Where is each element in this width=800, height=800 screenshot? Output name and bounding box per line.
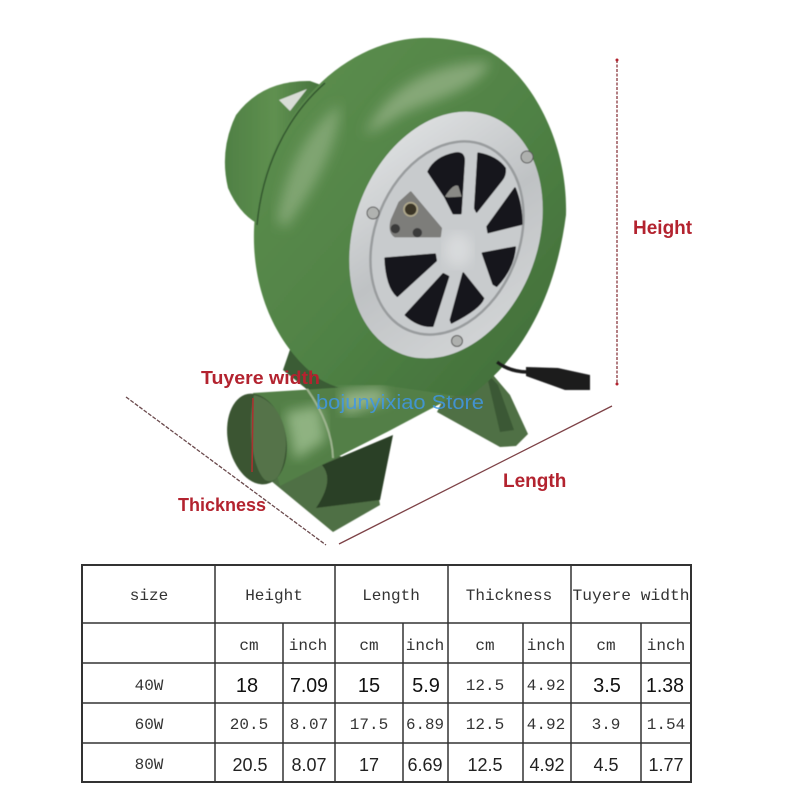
power cable bbox=[497, 362, 528, 372]
body seam bbox=[257, 83, 325, 225]
glossy highlight upper bbox=[365, 62, 490, 135]
screw bottom bbox=[452, 336, 462, 346]
plate inner ring bbox=[343, 118, 551, 358]
blower product illustration bbox=[219, 38, 590, 532]
60W row: 6.89 bbox=[406, 716, 444, 734]
units row: cm bbox=[359, 637, 379, 655]
40W row: 12.5 bbox=[466, 677, 504, 695]
units row: cm bbox=[239, 637, 259, 655]
units row: cm bbox=[596, 637, 616, 655]
pipe collar bbox=[307, 389, 333, 458]
60W row: 3.9 bbox=[592, 716, 620, 734]
header row: Height bbox=[245, 587, 303, 605]
pipe highlight bbox=[285, 405, 326, 460]
80W row: 20.5 bbox=[232, 755, 268, 775]
label: tuyere width: Tuyere width bbox=[201, 367, 320, 388]
header row: Tuyere width bbox=[572, 587, 690, 605]
units row: inch bbox=[527, 637, 565, 655]
60W row: 20.5 bbox=[230, 716, 268, 734]
40W row bbox=[135, 675, 684, 697]
length dimension line bbox=[339, 406, 612, 544]
glossy highlight left bbox=[277, 105, 340, 228]
label: height: Height bbox=[633, 218, 693, 239]
screw top right bbox=[521, 151, 533, 163]
40W row: 18 bbox=[236, 675, 258, 697]
front foot support bbox=[316, 435, 393, 508]
60W row: 8.07 bbox=[290, 716, 328, 734]
80W row: 4.92 bbox=[529, 755, 565, 775]
front foot bbox=[230, 440, 380, 532]
pipe opening bbox=[219, 388, 295, 490]
upper support bbox=[283, 335, 380, 400]
plate outer bbox=[316, 84, 576, 386]
80W row: 8.07 bbox=[291, 755, 327, 775]
size table bbox=[82, 565, 691, 782]
pipe highlight right bbox=[340, 388, 390, 415]
volute body bbox=[254, 38, 566, 396]
40W row: 15 bbox=[358, 675, 380, 697]
table grid bbox=[82, 565, 691, 782]
header row: Length bbox=[362, 587, 420, 605]
rear label sticker bbox=[279, 89, 307, 111]
tuyere width marker bbox=[252, 398, 253, 472]
60W row: 4.92 bbox=[527, 716, 565, 734]
store watermark: bojunyixiao Store bbox=[316, 392, 484, 414]
header row: size bbox=[130, 587, 168, 605]
80W row: 4.5 bbox=[593, 755, 619, 775]
60W row: 1.54 bbox=[647, 716, 685, 734]
rear foot bbox=[437, 362, 528, 447]
units row: inch bbox=[647, 637, 685, 655]
units row bbox=[239, 637, 685, 655]
80W row bbox=[135, 755, 684, 775]
60W row: 60W bbox=[135, 716, 164, 734]
vent openings bbox=[385, 153, 522, 326]
label: length: Length bbox=[503, 471, 566, 492]
header row: Thickness bbox=[466, 587, 552, 605]
60W row: 17.5 bbox=[350, 716, 388, 734]
80W row: 17 bbox=[359, 755, 379, 775]
thickness dimension line bbox=[126, 397, 326, 545]
hub bbox=[444, 233, 472, 267]
faceplate bbox=[316, 84, 576, 386]
40W row: 3.5 bbox=[593, 675, 621, 697]
40W row: 4.92 bbox=[527, 677, 565, 695]
units row: inch bbox=[289, 637, 327, 655]
60W row: 12.5 bbox=[466, 716, 504, 734]
40W row: 5.9 bbox=[412, 675, 440, 697]
motor detail bbox=[404, 203, 417, 216]
rear foot shadow bbox=[486, 372, 514, 432]
height dimension line bbox=[616, 58, 618, 386]
units row: inch bbox=[406, 637, 444, 655]
screw left bbox=[367, 207, 379, 219]
rear inlet cylinder bbox=[225, 81, 335, 240]
80W row: 12.5 bbox=[467, 755, 503, 775]
outlet pipe bbox=[253, 385, 455, 486]
label: thickness: Thickness bbox=[178, 495, 266, 515]
60W row bbox=[135, 716, 685, 734]
40W row: 40W bbox=[135, 677, 164, 695]
40W row: 1.38 bbox=[646, 675, 684, 697]
80W row: 1.77 bbox=[648, 755, 684, 775]
80W row: 80W bbox=[135, 756, 164, 774]
40W row: 7.09 bbox=[290, 675, 328, 697]
pipe inner bbox=[251, 395, 286, 481]
header row bbox=[130, 587, 690, 605]
80W row: 6.69 bbox=[407, 755, 443, 775]
dc plug bbox=[526, 367, 590, 390]
units row: cm bbox=[475, 637, 495, 655]
